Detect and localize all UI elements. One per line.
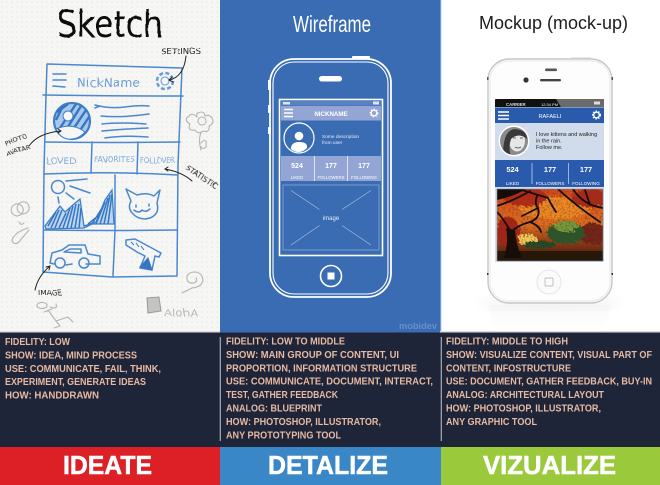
- image placeholder: image: [323, 216, 340, 222]
- portrait photo: [498, 126, 530, 156]
- icon: settings gear: [157, 73, 173, 89]
- text: sketch details: EXPERIMENT, GENERATE IDEAS: [5, 377, 146, 388]
- heading: Mockup: Mockup (mock-up): [479, 13, 628, 33]
- stats row: 524: [506, 165, 520, 174]
- status bar: 12:34 PM: [541, 102, 558, 107]
- status bar: [281, 101, 381, 106]
- doodle: balloon face: [11, 202, 29, 244]
- callout: settings: [161, 47, 201, 82]
- home button: [320, 266, 342, 286]
- app screen: [495, 99, 608, 262]
- stats row: 177: [580, 165, 592, 174]
- callout: statistic: STATISTIC: [184, 163, 220, 191]
- callout: image: [35, 266, 62, 297]
- doodle: stick figure: [37, 302, 73, 328]
- callout: photo avatar: PHOTO: [4, 132, 28, 148]
- stats row: FOLLOWERS: [536, 181, 564, 186]
- status bar: CARRIER: [506, 102, 526, 107]
- profile text: in the rain.: [536, 138, 562, 144]
- text: wireframe details: PROPORTION, INFORMATION STRUCTURE: [226, 364, 417, 374]
- text: wireframe details: SHOW: MAIN GROUP OF CONTENT, UI: [226, 350, 399, 361]
- stat labels: FAVORITES: [94, 155, 135, 164]
- profile text: I love kittens and walking: [536, 132, 597, 138]
- text: wireframe details: ANY PROTOTYPING TOOL: [226, 430, 341, 442]
- banner: detalize: [220, 447, 441, 485]
- callout: statistic: [165, 163, 220, 191]
- stats row: FOLLOWING: [572, 181, 600, 186]
- text: wireframe details: FIDELITY: LOW TO MIDDLE: [226, 336, 345, 348]
- text: sketch details: [5, 337, 161, 402]
- callout: photo avatar: [4, 129, 61, 158]
- header bar: [281, 106, 381, 120]
- doodle: aloha: AlohA: [164, 308, 198, 319]
- nickname label: NickName: [77, 76, 140, 90]
- heading: Wireframe: Wireframe: [293, 11, 371, 37]
- banner: vizualize: VIZUALIZE: [483, 450, 616, 480]
- doodle: aloha: [147, 297, 198, 319]
- text: wireframe details: TEST, GATHER FEEDBACK: [226, 390, 339, 401]
- drawing: car: [50, 245, 100, 265]
- icon: menu: [53, 74, 66, 87]
- drawing: gun: [126, 239, 161, 270]
- callout: image: IMAGE: [38, 289, 62, 297]
- camera and speaker: [523, 68, 561, 83]
- stats row: 177: [358, 163, 370, 170]
- text: wireframe details: USE: COMMUNICATE, DOCUMENT, INTERACT,: [226, 377, 433, 388]
- wireframe phone: [268, 56, 391, 297]
- banner: detalize: DETALIZE: [268, 450, 388, 480]
- doodle: flower: [186, 112, 213, 150]
- watermark: mobidev: mobidev: [399, 321, 438, 332]
- sketch phone frame: [43, 64, 183, 277]
- phone shadow and reflection: [480, 298, 620, 331]
- stat labels: LOVED: [46, 157, 76, 167]
- callout: settings: SETtINGS: [161, 47, 201, 56]
- avatar drawing: [54, 103, 90, 139]
- stats row: 177: [544, 165, 556, 174]
- stats row: LIKED: [291, 175, 303, 180]
- description: Some description: [322, 134, 359, 140]
- banner: ideate: IDEATE: [63, 450, 152, 480]
- avatar placeholder: [284, 123, 314, 153]
- stat labels: FOLLOVER: [140, 156, 175, 165]
- panel: info band: [0, 331, 660, 447]
- text: sketch details: HOW: HANDDRAWN: [5, 391, 99, 402]
- description squiggles: [95, 105, 149, 138]
- panel: sketch: [0, 0, 220, 332]
- callout: photo avatar: AVATAR: [5, 143, 31, 158]
- text: mockup details: ANY GRAPHIC TOOL: [446, 417, 537, 428]
- text: mockup details: [446, 336, 652, 428]
- text: mockup details: FIDELITY: MIDDLE TO HIGH: [446, 336, 568, 348]
- stats row: FOLLOWERS: [318, 175, 345, 180]
- text: wireframe details: ANALOG: BLUEPRINT: [226, 404, 322, 414]
- banner: ideate: [0, 447, 220, 485]
- stats row: LIKED: [506, 181, 520, 186]
- panel: mockup: [440, 0, 627, 331]
- text: mockup details: ANALOG: ARCHITECTURAL LAYOUT: [446, 390, 604, 401]
- text: sketch details: SHOW: IDEA, MIND PROCESS: [5, 351, 137, 362]
- speaker: [319, 76, 342, 82]
- text: wireframe details: [226, 336, 433, 442]
- text: mockup details: HOW: PHOTOSHOP, ILLUSTRATOR,: [446, 404, 601, 414]
- text: wireframe details: HOW: PHOTOSHOP, ILLUSTRATOR,: [226, 417, 381, 428]
- text: sketch details: FIDELITY: LOW: [5, 337, 70, 348]
- stats row: 177: [325, 163, 337, 170]
- header bar: NICKNAME: [314, 111, 348, 118]
- text: mockup details: CONTENT, INFOSTRUCTURE: [446, 364, 571, 374]
- status bar: [495, 99, 604, 107]
- stats row: [281, 156, 381, 181]
- banner: vizualize: [441, 447, 660, 485]
- drawing: mountains: [45, 179, 114, 229]
- image placeholder: [283, 185, 379, 250]
- home button: [537, 270, 561, 294]
- description: from user: [322, 140, 343, 146]
- heading: Sketch: Sketch: [57, 3, 163, 46]
- drawing: cat: [126, 189, 160, 219]
- header bar: [495, 108, 604, 123]
- header bar: RAFAELI: [538, 114, 562, 120]
- phone body: [487, 58, 613, 303]
- screen: [280, 100, 382, 256]
- stat labels: [46, 155, 175, 167]
- panel: wireframe: [220, 0, 440, 332]
- text: sketch details: USE: COMMUNICATE, FAIL, THINK,: [5, 364, 161, 375]
- doodle: spiral: [182, 272, 203, 293]
- stats row: [495, 160, 604, 187]
- autumn photo: [496, 188, 608, 261]
- stats row: FOLLOWING: [351, 175, 378, 180]
- stats row: 524: [291, 163, 303, 170]
- profile text: Follow me.: [536, 145, 563, 151]
